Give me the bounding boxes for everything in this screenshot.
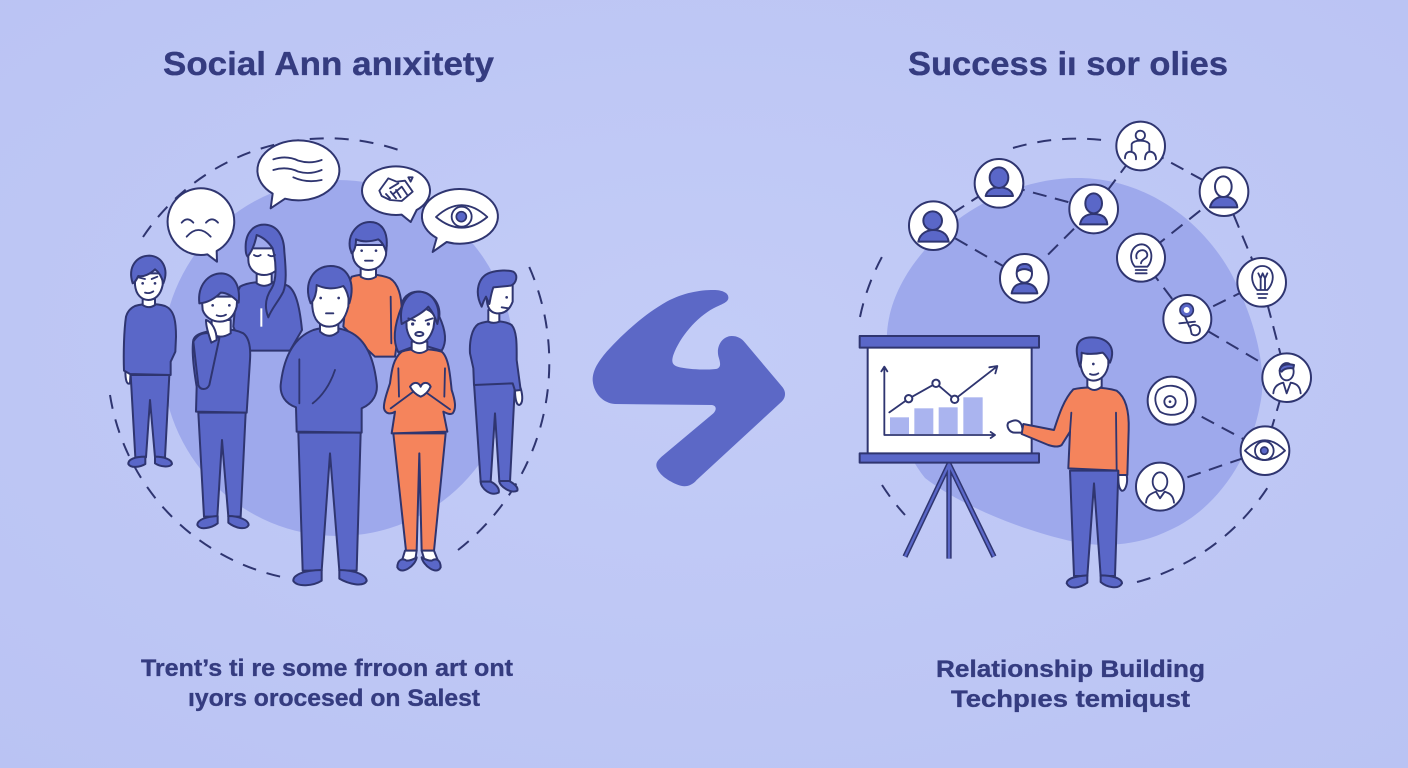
node: ribbon <box>1163 295 1211 343</box>
person: center man <box>281 266 377 585</box>
node: bulb <box>1237 258 1286 307</box>
background blob right <box>887 178 1262 545</box>
arrow: transition symbol <box>593 290 785 486</box>
node: person 3 <box>1069 185 1118 233</box>
person: far left man <box>124 256 176 467</box>
node: person 2 <box>975 159 1023 208</box>
speech bubble: sad face <box>168 188 234 262</box>
node: person outline <box>1136 463 1184 511</box>
person: back woman <box>233 225 302 351</box>
background blob left <box>162 180 514 536</box>
caption: left <box>141 655 513 712</box>
speech bubble: handshake <box>362 166 430 222</box>
caption: right: Techpıes temiqust <box>951 686 1190 713</box>
caption: left: Trent’s ti re some frroon art ont <box>141 655 513 682</box>
node: person 4 <box>1000 254 1049 303</box>
node: gear <box>1148 377 1196 425</box>
dashed ring left <box>110 138 549 577</box>
network connectors <box>933 146 1287 487</box>
presentation board <box>860 336 1039 463</box>
tripod <box>905 464 994 559</box>
dashed ring right <box>860 139 1268 582</box>
caption: left: ıyors orocesed on Salest <box>188 685 480 712</box>
node: person 1 <box>909 201 958 250</box>
panel: social anxiety illustration <box>110 138 549 585</box>
person: back man orange <box>343 222 402 357</box>
node: person 5 <box>1200 167 1248 216</box>
node: eye <box>1241 426 1289 475</box>
node: businessman <box>1262 353 1311 402</box>
caption: right <box>936 656 1205 713</box>
title: social anxiety: Social Ann anıxitety <box>163 45 495 82</box>
node: group <box>1116 122 1165 170</box>
presenter <box>1008 337 1129 588</box>
speech bubble: wavy lines <box>257 140 339 208</box>
node: bulb spiral <box>1117 234 1165 282</box>
speech bubble: eye <box>422 189 498 252</box>
panel: success illustration <box>860 122 1311 588</box>
title: success: Success iı sor olies <box>908 45 1228 82</box>
person: orange woman <box>384 292 455 571</box>
person: hand on cheek <box>193 273 250 528</box>
person: far right man <box>470 271 522 494</box>
bar chart <box>881 366 997 438</box>
caption: right: Relationship Building <box>936 656 1205 683</box>
